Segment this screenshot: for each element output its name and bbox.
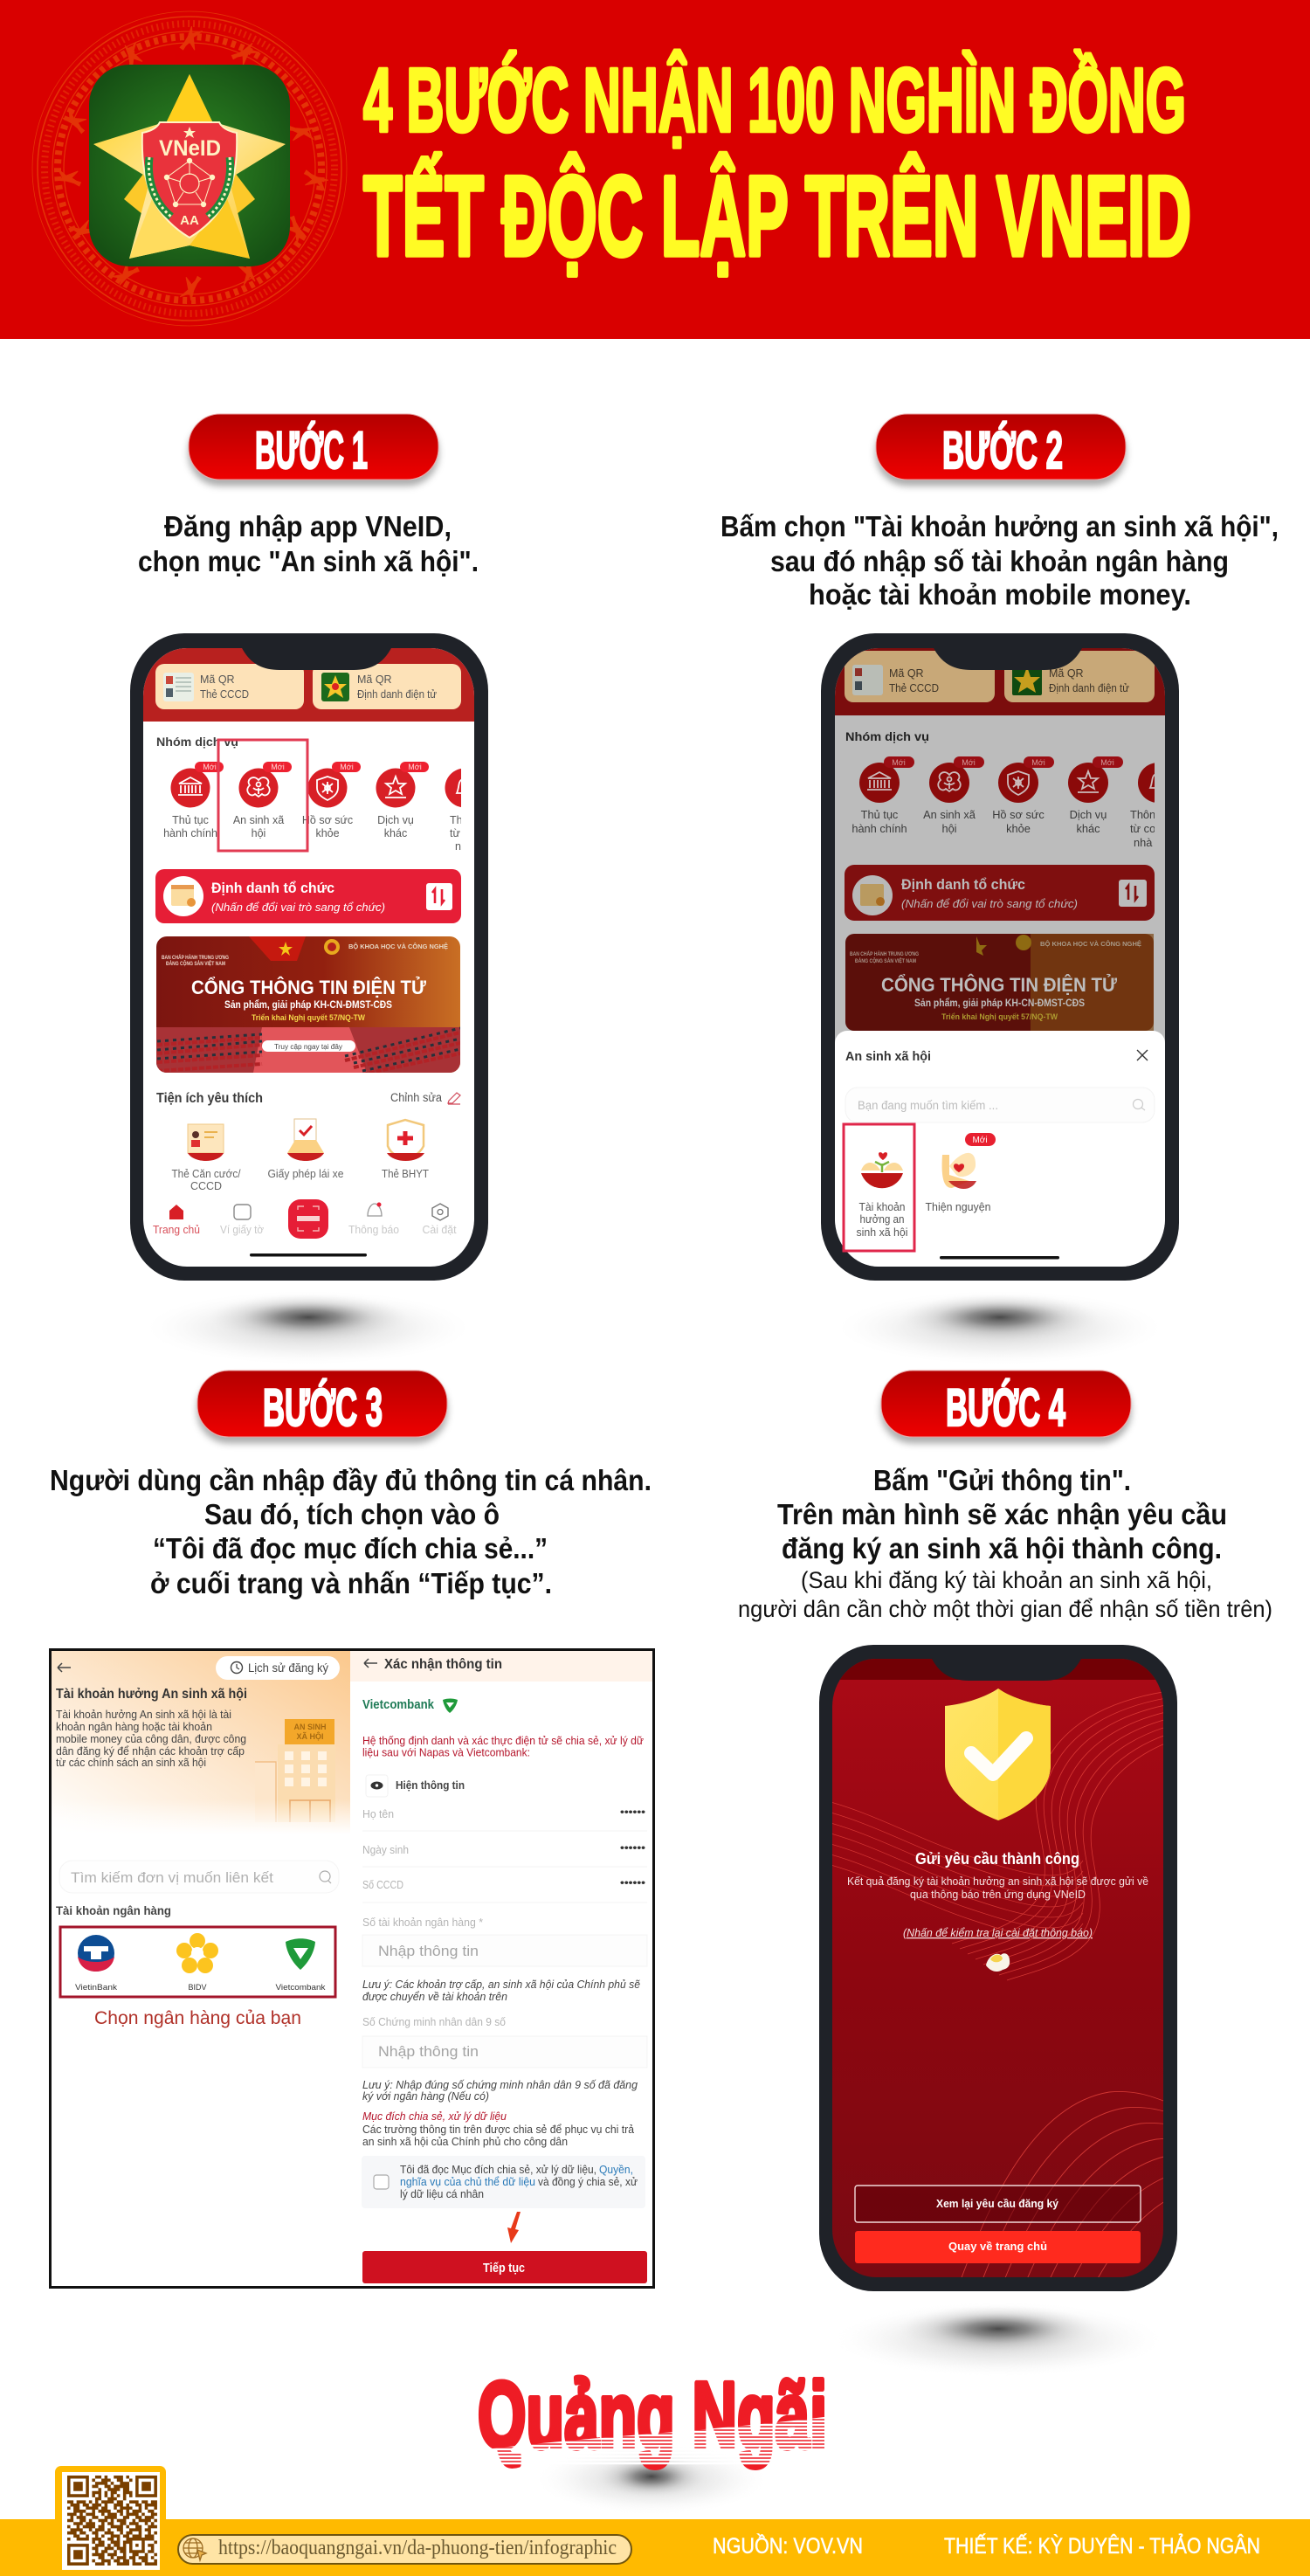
right screen: confirmation form: Nhập thông tin [378, 2043, 479, 2060]
button: continue [362, 2251, 647, 2283]
consent box [362, 2156, 645, 2208]
card: QR CCCD: Thẻ CCCD [200, 688, 249, 701]
service icons: Mới [271, 763, 285, 771]
dimmed service icons: khỏe [1006, 822, 1031, 835]
success message: (Nhấn để kiểm tra lại cài đặt thông báo) [903, 1926, 1093, 1939]
right screen: confirmation form: liệu sau với Napas và Vietcombank: [362, 1747, 530, 1759]
left screen: bank account [51, 1650, 350, 2028]
title [363, 50, 1191, 280]
banner: e-portal: BỘ KHOA HỌC VÀ CÔNG NGHỆ [348, 943, 448, 950]
step 1 badge [189, 414, 438, 480]
consent box: Tôi đã đọc Mục đích chia sẻ, xử lý dữ liệu, [400, 2164, 596, 2176]
right screen: confirmation form [350, 1650, 653, 2283]
bottom sheet: Bạn đang muốn tìm kiếm ... [858, 1099, 998, 1112]
phone: step 2 [821, 633, 1179, 1284]
step 3 description: “Tôi đã đọc mục đích chia sẻ...” [153, 1532, 548, 1564]
service icons: hành chính [163, 827, 217, 839]
icon: VNeID app logo: AA [180, 213, 199, 228]
logo: Vietcombank [276, 1938, 326, 1992]
dimmed card: QR digital ID: Mã QR [1049, 667, 1084, 680]
phone: step 4 [819, 1645, 1269, 2374]
dimmed service icons: Dịch vụ [1070, 808, 1107, 821]
step 4 description: (Sau khi đăng ký tài khoản an sinh xã hội, [801, 1567, 1212, 1593]
service icons: nhà [455, 840, 473, 853]
step 3 description: Người dùng cần nhập đầy đủ thông tin cá nhân. [50, 1464, 652, 1496]
service icons: Mới [203, 763, 217, 771]
dimmed service icons: Hồ sơ sức [992, 808, 1045, 821]
arrow [507, 2212, 521, 2243]
website URL pill: https://baoquangngai.vn/da-phuong-tien/infographic [218, 2537, 617, 2559]
left screen: bank account: Tài khoản hưởng An sinh xã hội [56, 1687, 247, 1702]
right screen: confirmation form: Mục đích chia sẻ, xử lý dữ liệu [362, 2110, 507, 2123]
service icons: Mới [340, 763, 354, 771]
dimmed service icons: Mới [962, 758, 976, 767]
favourites heading [156, 1091, 460, 1106]
favourites heading: Chỉnh sửa [390, 1091, 442, 1104]
step 2 description: sau đó nhập số tài khoản ngân hàng [770, 545, 1229, 577]
right screen: confirmation form: Họ tên [362, 1808, 394, 1820]
bottom sheet [835, 1031, 1165, 1284]
website URL pill [178, 2535, 631, 2564]
banner: e-portal [156, 936, 460, 1074]
step 4 description: người dân cần chờ một thời gian để nhận số tiền trên) [738, 1596, 1272, 1622]
right screen: confirmation form: Xác nhận thông tin [384, 1657, 502, 1672]
step 3 badge: BƯỚC 3 [263, 1378, 383, 1437]
favourite: insurance card: Thẻ BHYT [382, 1168, 429, 1180]
right screen: confirmation form: Lưu ý: Các khoản trợ cấp, an sinh xã hội của Chính phủ sẽ [362, 1979, 640, 1991]
source credit: NGUỒN: VOV.VN [713, 2532, 863, 2559]
dimmed service icons: khác [1076, 822, 1100, 835]
step 4 badge [881, 1371, 1131, 1437]
banner: e-portal: CỔNG THÔNG TIN ĐIỆN TỬ [191, 977, 427, 998]
bottom sheet: An sinh xã hội [845, 1050, 931, 1064]
consent box: lý dữ liệu cá nhân [400, 2188, 484, 2200]
dimmed service icons: Thông [1130, 808, 1162, 821]
organisation ID bar [155, 869, 461, 923]
dimmed banner: Triển khai Nghị quyết 57/NQ-TW [941, 1012, 1058, 1022]
left screen: bank account: dân đăng ký để nhận các khoản trợ cấp [56, 1745, 245, 1758]
app header band [143, 648, 474, 722]
step 4 description [738, 1464, 1272, 1622]
dimmed organisation bar [845, 865, 1155, 921]
card: QR CCCD: Mã QR [200, 673, 235, 686]
organisation ID bar: (Nhấn để đổi vai trò sang tổ chức) [211, 901, 385, 914]
dimmed service icons: nhà [1134, 836, 1153, 849]
dimmed banner: BỘ KHOA HỌC VÀ CÔNG NGHỆ [1040, 940, 1141, 948]
step 3 badge [197, 1371, 447, 1437]
left screen: bank account: Tài khoản ngân hàng [56, 1903, 171, 1917]
card: QR digital ID: Mã QR [357, 673, 392, 686]
dimmed card: QR CCCD: Mã QR [889, 667, 924, 680]
highlight box: An sinh xã hội [218, 740, 307, 851]
heading: service group: Nhóm dịch vụ [156, 735, 238, 749]
right screen: confirmation form: Hệ thống định danh và xác thực điện tử sẽ chia sẻ, xử lý dữ [362, 1735, 644, 1747]
dimmed card: QR digital ID [1004, 651, 1155, 702]
decorative wave lines [832, 1692, 1163, 2277]
left screen: bank account: Lịch sử đăng ký [248, 1661, 328, 1675]
left screen: bank account: từ các chính sách an sinh xã hội [56, 1757, 206, 1769]
step 4 badge: BƯỚC 4 [946, 1378, 1065, 1437]
success message [847, 1850, 1148, 1939]
logo: BIDV: BIDV [189, 1983, 207, 1992]
logo: Quảng Ngãi [472, 2362, 838, 2514]
dimmed service icons: Mới [1100, 758, 1114, 767]
illustration: building: AN SINH [293, 1723, 327, 1731]
dimmed heading: Nhóm dịch vụ [845, 729, 929, 743]
dimmed service icons: từ cơ [1130, 822, 1157, 835]
icon: social security account [856, 1152, 908, 1239]
phone shadow: step 2 [838, 1291, 1162, 1364]
step 4 description: Bấm "Gửi thông tin". [873, 1464, 1131, 1496]
logo: VietinBank: VietinBank [75, 1983, 117, 1992]
success message: qua thông báo trên ứng dụng VNeID [910, 1888, 1086, 1901]
favourite: ID card [171, 1124, 241, 1192]
step 3 description: Sau đó, tích chọn vào ô [204, 1498, 500, 1530]
step 2 description: hoặc tài khoản mobile money. [809, 578, 1191, 611]
right screen: confirmation form: Các trường thông tin trên được chia sẻ để phục vụ chi trả [362, 2124, 634, 2136]
right screen: confirmation form: được chuyển về tài khoản trên [362, 1991, 507, 2003]
button: review request: Xem lại yêu cầu đăng ký [936, 2197, 1059, 2210]
phone: step 1 [130, 633, 488, 1281]
service icons: Thủ tục [172, 814, 209, 826]
step 3 description [50, 1464, 652, 1599]
icon: globe cursor [183, 2538, 206, 2560]
dimmed service icons: hành chính [852, 822, 907, 835]
icon: social security account: hưởng an [859, 1213, 905, 1226]
left screen: bank account: Chọn ngân hàng của bạn [94, 2008, 301, 2028]
icon: loader blob [986, 1953, 1010, 1972]
dimmed banner: BAN CHẤP HÀNH TRUNG ƯƠNG [850, 949, 919, 957]
footer band [0, 2466, 1310, 2576]
highlight box: account [844, 1124, 914, 1251]
organisation ID bar: Định danh tổ chức [211, 881, 334, 896]
success message: Gửi yêu cầu thành công [915, 1850, 1079, 1868]
right screen: confirmation form: Hiện thông tin [396, 1779, 465, 1792]
logo: BIDV [176, 1933, 218, 1992]
card: QR digital ID: Định danh điện tử [357, 688, 437, 701]
right screen: confirmation form: •••••• [620, 1806, 645, 1818]
right screen: confirmation form: Vietcombank [362, 1698, 435, 1712]
bottom navigation: Thông báo [348, 1224, 399, 1236]
bottom navigation: Cài đặt [423, 1224, 457, 1236]
logo: Quảng Ngãi: Quảng Ngãi [478, 2362, 827, 2468]
phone shadow: step 4 [837, 2303, 1160, 2376]
icon: social security account: sinh xã hội [856, 1226, 908, 1239]
bottom navigation [153, 1199, 457, 1256]
left screen: bank account: Tài khoản hưởng An sinh xã hội là tài [56, 1709, 231, 1721]
bottom navigation: Ví giấy tờ [220, 1224, 264, 1236]
button: review request [855, 2186, 1141, 2222]
favourite: ID card: Thẻ Căn cước/ [171, 1168, 241, 1180]
right screen: confirmation form: Số Chứng minh nhân dân 9 số [362, 2016, 506, 2028]
step 3 description: ở cuối trang và nhấn “Tiếp tục”. [150, 1567, 552, 1599]
dimmed service icons: Mới [1031, 758, 1045, 767]
consent box: nghĩa vụ của chủ thể dữ liệu [400, 2176, 535, 2188]
favourites heading: Tiện ích yêu thích [156, 1091, 263, 1106]
service icons: Hồ sơ sức [302, 814, 353, 826]
illustration: building: XÃ HỘI [296, 1731, 324, 1741]
dimmed service icons: An sinh xã [923, 808, 976, 821]
icon: charity [926, 1133, 996, 1213]
QR code [55, 2466, 166, 2576]
banner: e-portal: Sản phẩm, giải pháp KH-CN-ĐMST-CĐS [224, 1000, 392, 1011]
dimmed service icons [852, 756, 1155, 846]
right screen: confirmation form: Ngày sinh [362, 1844, 409, 1856]
bottom navigation: Trang chủ [153, 1224, 200, 1236]
success message: Kết quả đăng ký tài khoản hưởng an sinh xã hội sẽ được gửi về [847, 1875, 1148, 1888]
dimmed card: QR digital ID: Định danh điện tử [1049, 682, 1129, 694]
dimmed service icons: hội [941, 822, 957, 835]
icon: yellow shield with check [945, 1689, 1051, 1820]
right screen: confirmation form: •••••• [620, 1876, 645, 1889]
service icons: khác [384, 827, 407, 839]
step 1 description: Đăng nhập app VNeID, [164, 510, 452, 542]
design credit: THIẾT KẾ: KỲ DUYÊN - THẢO NGÂN [944, 2532, 1260, 2559]
card: QR CCCD [155, 664, 304, 709]
step 2 badge: BƯỚC 2 [942, 421, 1063, 480]
service icons [164, 762, 461, 850]
dimmed banner: ĐẢNG CỘNG SẢN VIỆT NAM [855, 957, 916, 964]
banner: e-portal: Triển khai Nghị quyết 57/NQ-TW [252, 1013, 365, 1023]
icon: charity: Mới [972, 1136, 988, 1145]
left screen: bank account: khoản ngân hàng hoặc tài khoản [56, 1721, 212, 1733]
left screen: bank account: mobile money của công dân, được công [56, 1733, 246, 1745]
right screen: confirmation form: •••••• [620, 1841, 645, 1854]
step 4 description: Trên màn hình sẽ xác nhận yêu cầu [777, 1498, 1227, 1530]
illustration: building [51, 1719, 350, 1834]
step 4 description: đăng ký an sinh xã hội thành công. [782, 1532, 1222, 1564]
right screen: confirmation form: ký với ngân hàng (Nếu có) [362, 2090, 489, 2103]
dimmed organisation bar: (Nhấn để đổi vai trò sang tổ chức) [901, 897, 1078, 910]
dimmed card: QR CCCD [845, 651, 995, 702]
service icons: Mới [408, 763, 422, 771]
step 1 description: chọn mục "An sinh xã hội". [138, 545, 479, 577]
right screen: confirmation form: Số CCCD [362, 1879, 403, 1891]
dimmed banner: CỔNG THÔNG TIN ĐIỆN TỬ [881, 974, 1118, 996]
favourite: ID card: CCCD [190, 1180, 222, 1192]
dimmed banner [845, 934, 1154, 1031]
card: QR digital ID [313, 664, 461, 709]
dimmed service icons: Mới [892, 758, 906, 767]
dimmed header band [835, 648, 1165, 715]
favourite: driving licence: Giấy phép lái xe [267, 1168, 344, 1180]
left screen: bank account: Tìm kiếm đơn vị muốn liên kết [71, 1869, 273, 1886]
service icons: từ cơ [450, 827, 476, 839]
service icons: khỏe [315, 827, 340, 839]
dimmed service icons: Thủ tục [861, 808, 899, 821]
dimmed card: QR CCCD: Thẻ CCCD [889, 682, 939, 694]
icon: charity: Thiện nguyện [926, 1201, 991, 1213]
banner: e-portal: ĐẢNG CỘNG SẢN VIỆT NAM [166, 959, 225, 967]
consent box: Quyền, [599, 2164, 633, 2176]
service icons: An sinh xã [233, 814, 284, 826]
favourite: insurance card [382, 1120, 429, 1180]
logo: Vietcombank: Vietcombank [276, 1983, 326, 1992]
header banner [0, 0, 1310, 339]
button: back home: Quay về trang chủ [948, 2240, 1047, 2253]
banner: e-portal: BAN CHẤP HÀNH TRUNG ƯƠNG [162, 952, 229, 961]
dimmed banner: Sản phẩm, giải pháp KH-CN-ĐMST-CĐS [914, 998, 1085, 1009]
right screen: confirmation form: an sinh xã hội của Chính phủ cho công dân [362, 2136, 568, 2148]
button: continue: Tiếp tục [483, 2262, 525, 2276]
bank selection box [60, 1927, 335, 1997]
icon: VNeID app logo [89, 65, 290, 266]
step 1 badge: BƯỚC 1 [255, 421, 368, 480]
favourite: driving licence [267, 1119, 344, 1180]
right screen: confirmation form: Lưu ý: Nhập đúng số chứng minh nhân dân 9 số đã đăng [362, 2079, 638, 2091]
panel: step 3 screenshots [50, 1649, 654, 2287]
bronze drum pattern [32, 11, 347, 326]
step 2 description [720, 510, 1279, 611]
right screen: confirmation form: Số tài khoản ngân hàng * [362, 1916, 483, 1929]
dimmed organisation bar: Định danh tổ chức [901, 877, 1025, 893]
step 2 badge [876, 414, 1126, 480]
service icons: Dịch vụ [377, 814, 414, 826]
service icons: Thông [450, 814, 480, 826]
phone shadow: step 1 [147, 1291, 470, 1364]
logo: VietinBank [75, 1935, 117, 1992]
right screen: confirmation form: Nhập thông tin [378, 1943, 479, 1959]
button: back home [855, 2231, 1141, 2263]
service icons: hội [252, 827, 265, 839]
icon: VNeID app logo: VNeID [159, 136, 221, 161]
step 1 description [138, 510, 479, 577]
consent box: và đồng ý chia sẻ, xử [538, 2176, 638, 2188]
banner: e-portal: Truy cập ngay tại đây [274, 1043, 342, 1051]
icon: social security account: Tài khoản [859, 1201, 906, 1213]
